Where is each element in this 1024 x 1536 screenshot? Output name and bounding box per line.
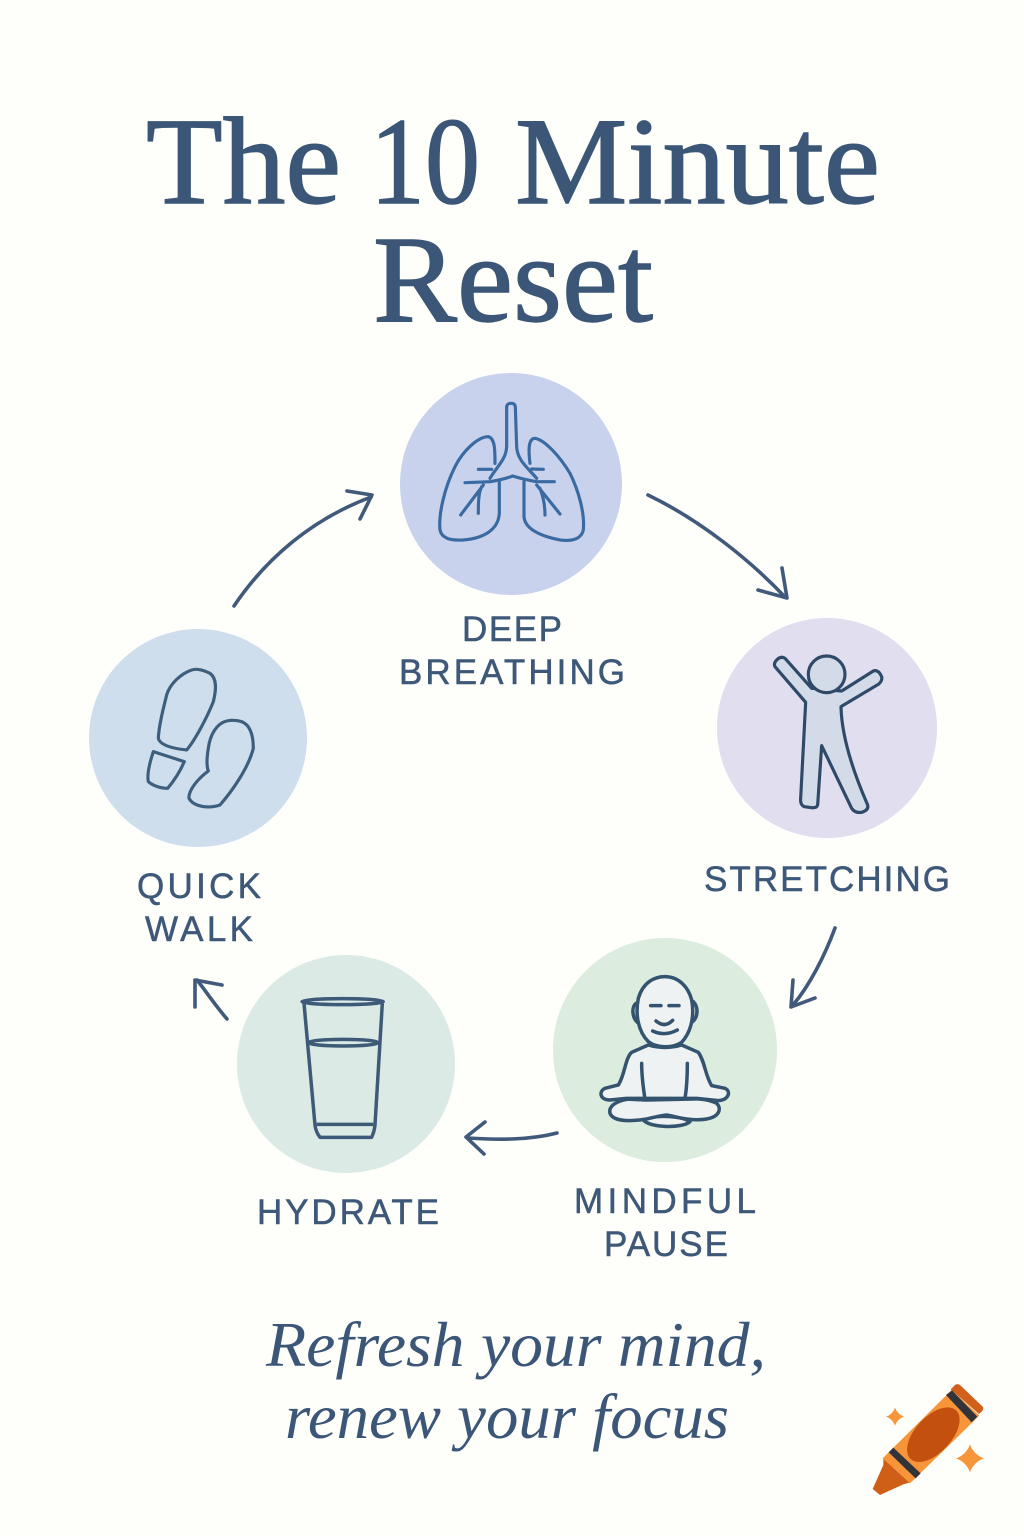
icon: stretching figure (774, 656, 882, 812)
label: quick walk: QUICK (137, 867, 261, 906)
arrow: breathing to stretching (648, 495, 787, 598)
arrow: walk to breathing (234, 491, 372, 606)
label: deep breathing (399, 610, 625, 692)
arrow: pause to hydrate (466, 1122, 557, 1154)
label: deep breathing: DEEP (462, 610, 562, 649)
label: quick walk (137, 867, 261, 949)
icon: footprints (148, 669, 253, 807)
step: stretching (704, 618, 950, 899)
label: hydrate: HYDRATE (257, 1193, 439, 1232)
circle: hydrate (237, 955, 455, 1173)
arrow: stretching to pause (791, 928, 835, 1007)
circle: stretching (717, 618, 937, 838)
label: mindful pause: MINDFUL (574, 1182, 756, 1221)
icon: meditating person (601, 977, 728, 1126)
step: mindful pause (553, 938, 777, 1264)
label: deep breathing: BREATHING (399, 653, 625, 692)
step: hydrate (237, 955, 455, 1232)
tagline: Refresh your mind, (265, 1310, 766, 1380)
circle: quick walk (89, 629, 307, 847)
circle: deep breathing (400, 373, 622, 595)
icon: crayon with sparkles (873, 1384, 984, 1495)
icon: lungs (440, 403, 584, 540)
icon: glass of water (302, 999, 383, 1137)
step: quick walk (89, 629, 307, 949)
title: Minute (515, 93, 880, 230)
label: stretching: STRETCHING (704, 860, 950, 899)
tagline (265, 1310, 766, 1452)
label: quick walk: WALK (145, 910, 253, 949)
title: 10 (370, 93, 480, 230)
title: The (146, 93, 341, 230)
title: Reset (373, 211, 653, 348)
circle: mindful pause (553, 938, 777, 1162)
title (146, 93, 880, 348)
label: mindful pause: PAUSE (604, 1225, 728, 1264)
label: mindful pause (574, 1182, 756, 1264)
tagline: renew your focus (285, 1382, 729, 1452)
step: deep breathing (399, 373, 625, 692)
arrow: hydrate to walk (195, 980, 227, 1019)
